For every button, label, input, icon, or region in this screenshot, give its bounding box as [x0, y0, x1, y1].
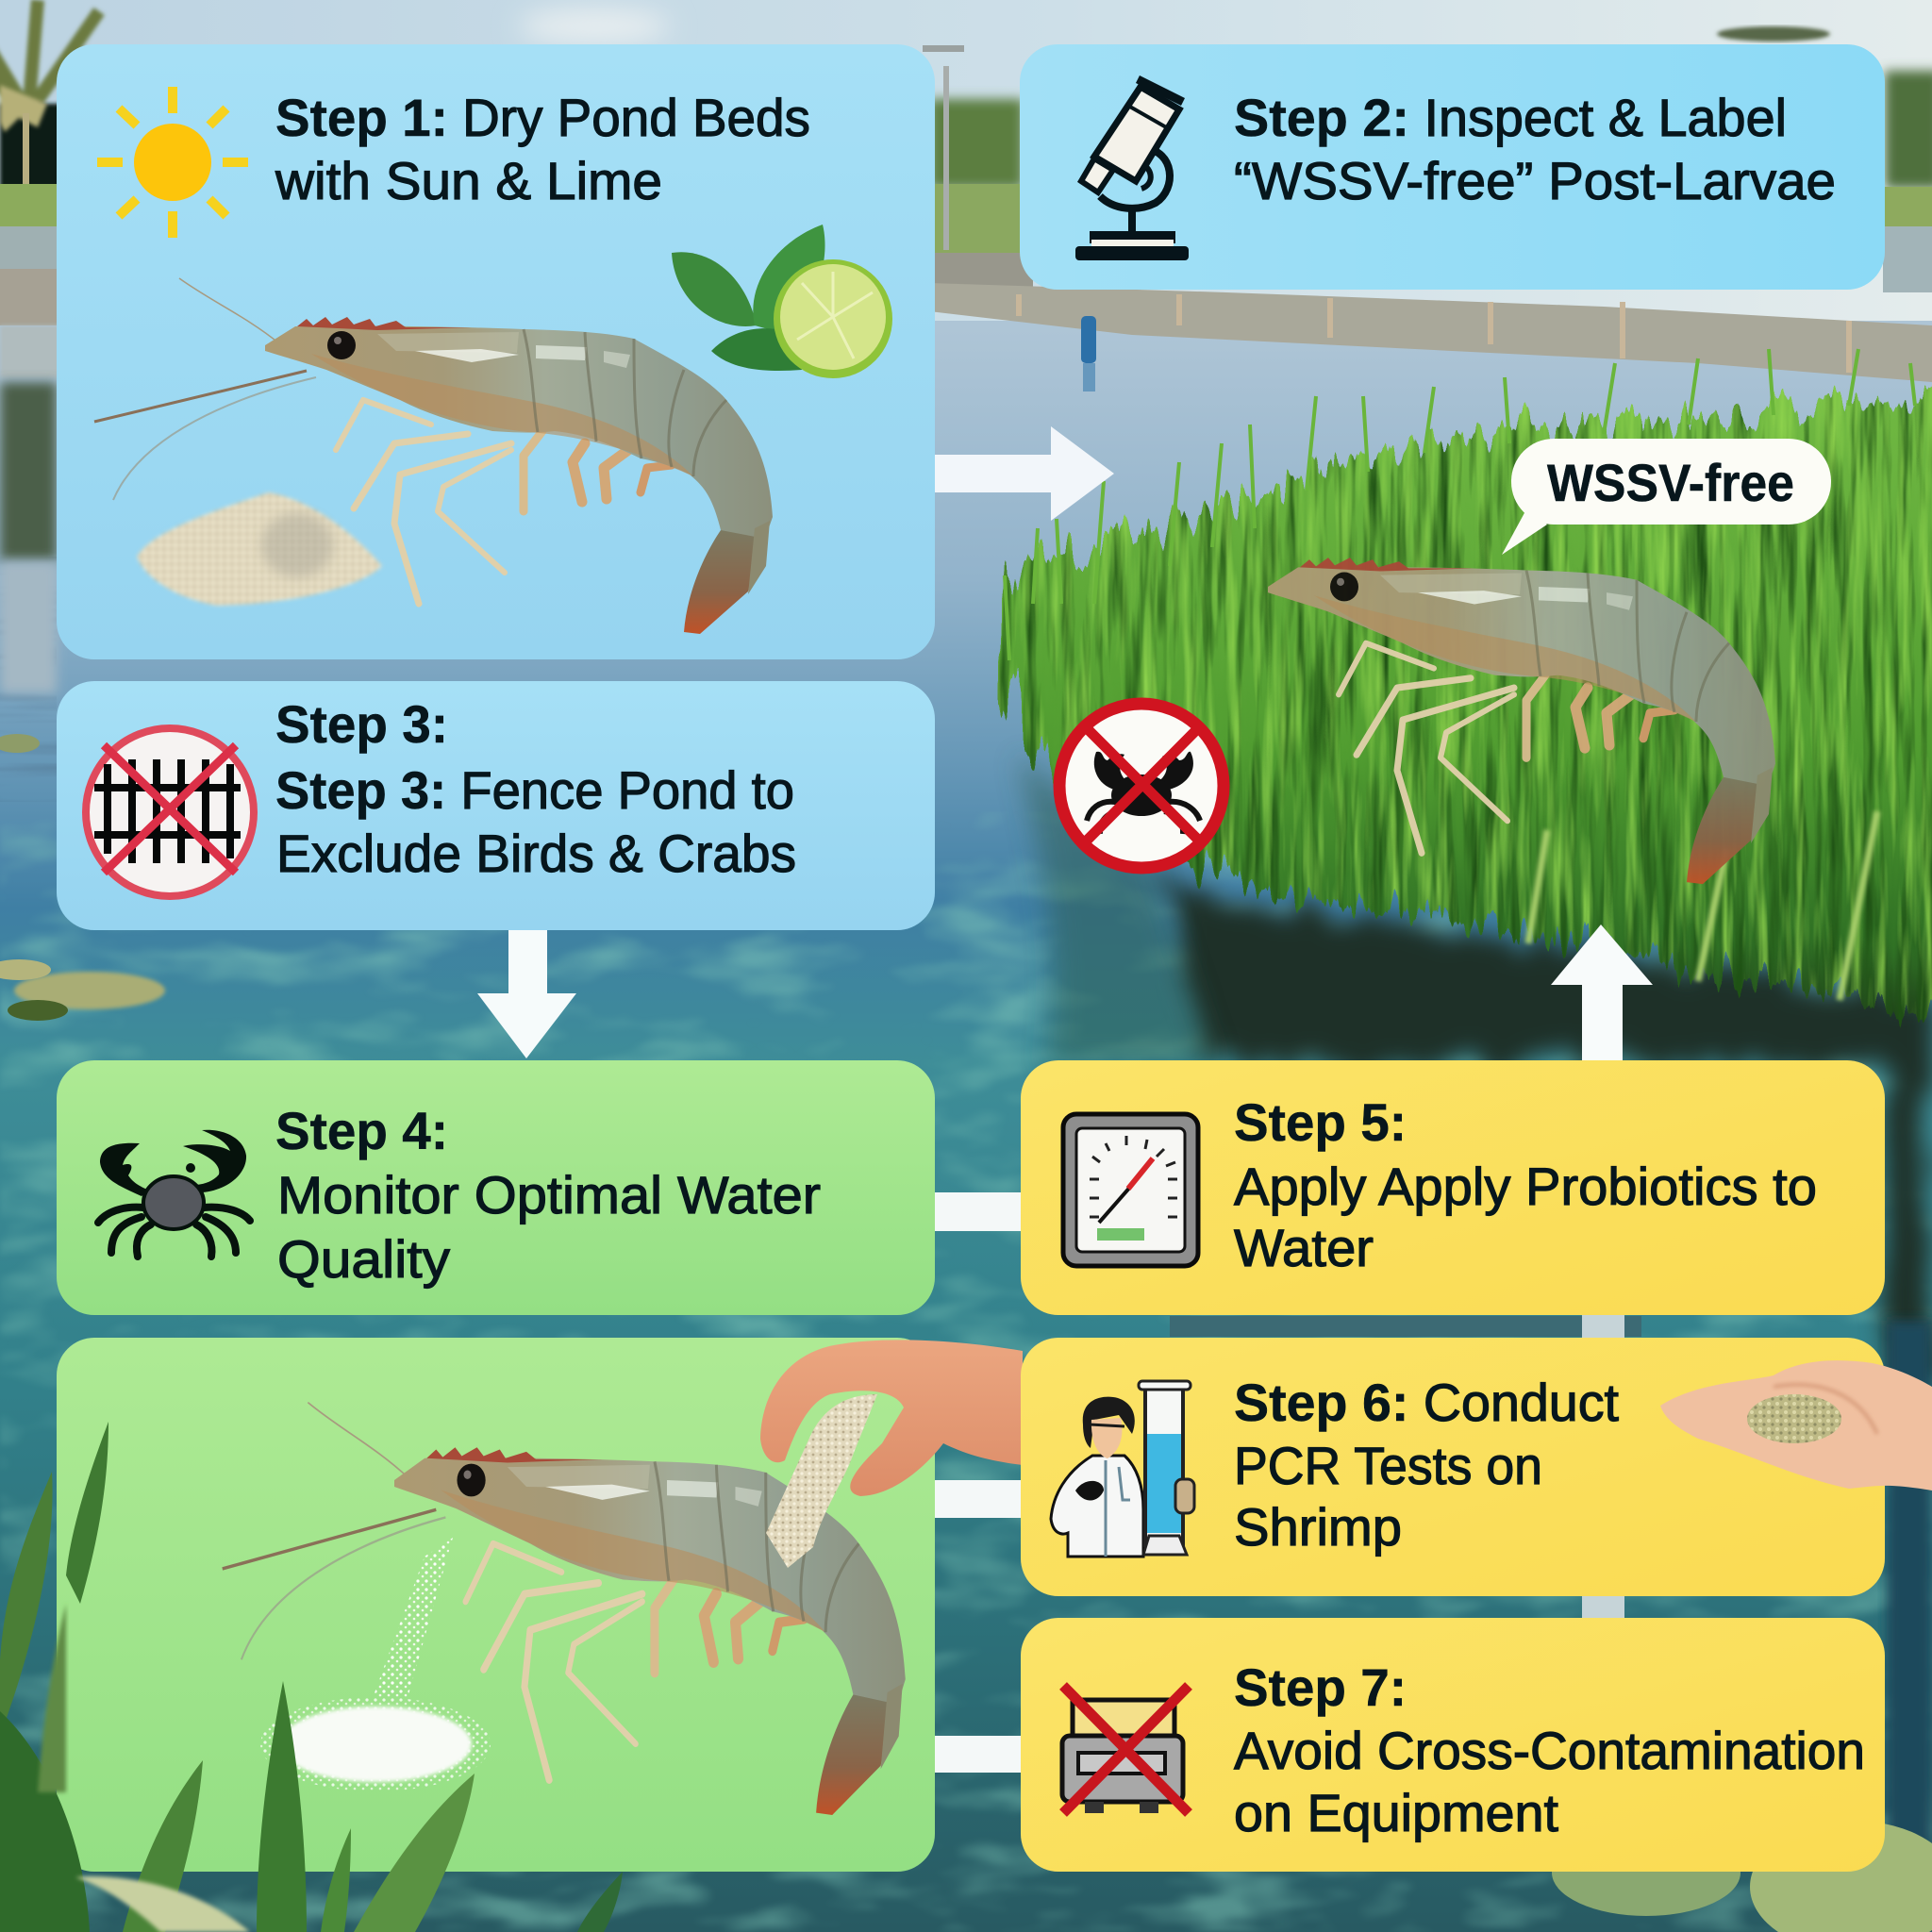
- icon: water quality gauge: [1063, 1114, 1198, 1266]
- arrow: Step 5 up to shrimp scene: [1551, 924, 1653, 1062]
- icon: scientist with test cylinder: [1051, 1381, 1194, 1557]
- open hand with pellets: [1660, 1360, 1932, 1491]
- heading: Step 4: Step 4:: [275, 1101, 448, 1160]
- middle trees and field: [923, 45, 1033, 300]
- panel: Step 6: [1021, 1338, 1885, 1596]
- left tree and bank: [0, 0, 99, 693]
- far right trees and field: [1717, 26, 1932, 292]
- callout: WSSV-free: WSSV-free: [1547, 453, 1794, 512]
- foreground leaves: [0, 1422, 623, 1932]
- heading: Step 6: PCR Tests on: [1234, 1436, 1542, 1495]
- panel: Step 3: [57, 681, 935, 930]
- left lily pads: [0, 734, 165, 1021]
- fence bank: [929, 283, 1932, 382]
- dark reflection under reeds: [1151, 877, 1932, 1377]
- hand sprinkling grains: [760, 1340, 1023, 1568]
- heading: Step 7: Step 7:: [1234, 1657, 1407, 1717]
- heading: Step 4: [275, 1101, 821, 1289]
- callout: WSSV-free: [1502, 439, 1831, 555]
- heading: Step 7: on Equipment: [1234, 1783, 1558, 1842]
- arrow: Step 3 down to Step 4: [477, 929, 576, 1058]
- heading: Step 7: Avoid Cross-Contamination: [1234, 1721, 1865, 1780]
- heading: Step 7: [1234, 1657, 1865, 1842]
- heading: Step 2: Step 2: Inspect & Label: [1234, 88, 1787, 147]
- shrimp in reeds: [1268, 558, 1775, 884]
- shrimp illustration: [223, 1403, 906, 1815]
- reed grass patch: [998, 349, 1932, 1028]
- connector: Step 4 to Step 5: [935, 1192, 1022, 1231]
- heading: Step 2: “WSSV-free” Post-Larvae: [1234, 151, 1836, 210]
- heading: Step 5: Water: [1234, 1218, 1374, 1277]
- heading: Step 4: Quality: [277, 1229, 450, 1289]
- connector: big green panel to Step 6: [935, 1480, 1022, 1518]
- panel: Step 7: [1021, 1618, 1885, 1872]
- heading: Step 3: Step 3: Fence Pond to: [275, 760, 794, 820]
- connector: Step 6 to Step 7: [1582, 1594, 1624, 1620]
- heading: Step 6: Shrimp: [1234, 1497, 1402, 1557]
- heading: Step 1: with Sun & Lime: [275, 151, 662, 210]
- icon: crab: [98, 1130, 250, 1257]
- heading: Step 5: [1234, 1092, 1817, 1277]
- heading: Step 6: Step 6: Conduct: [1234, 1373, 1619, 1432]
- heading: Step 1: [275, 88, 810, 210]
- right lily pads: [1552, 1821, 1932, 1932]
- arrow: Step 1 to shrimp scene: [935, 426, 1114, 521]
- icon: mint leaves and lime: [672, 225, 892, 378]
- panel: Step 2: [1020, 44, 1885, 290]
- salt stream and pile: [260, 1538, 491, 1791]
- connector: big green panel to Step 7: [935, 1736, 1022, 1773]
- heading: Step 1: Step 1: Dry Pond Beds: [275, 88, 810, 147]
- lime powder pile: [137, 492, 382, 606]
- heading: Step 6: [1234, 1373, 1619, 1557]
- icon: crossed-out equipment: [1062, 1686, 1189, 1813]
- connector: Step 5 to Step 6: [1582, 1313, 1624, 1340]
- panel: Step 5: [1021, 1060, 1885, 1315]
- icon: crossed-out fence: [86, 728, 254, 896]
- heading: Step 3: Step 3:: [275, 694, 448, 754]
- icon: sun: [97, 87, 248, 238]
- panel: big green probiotic illustration: [57, 1338, 935, 1872]
- icon: microscope: [1075, 79, 1189, 260]
- heading: Step 2: [1234, 88, 1836, 210]
- panel: Step 1: [57, 44, 935, 659]
- icon: no crabs sign: [1059, 704, 1224, 868]
- heading: Step 5: Step 5:: [1234, 1092, 1407, 1152]
- shrimp illustration: [94, 278, 773, 634]
- panel: Step 4: [57, 1060, 935, 1315]
- heading: Step 5: Apply Apply Probiotics to: [1234, 1157, 1817, 1216]
- heading: Step 3: Exclude Birds & Crabs: [276, 824, 796, 883]
- heading: Step 4: Monitor Optimal Water: [277, 1165, 821, 1224]
- heading: Step 3: [275, 694, 796, 883]
